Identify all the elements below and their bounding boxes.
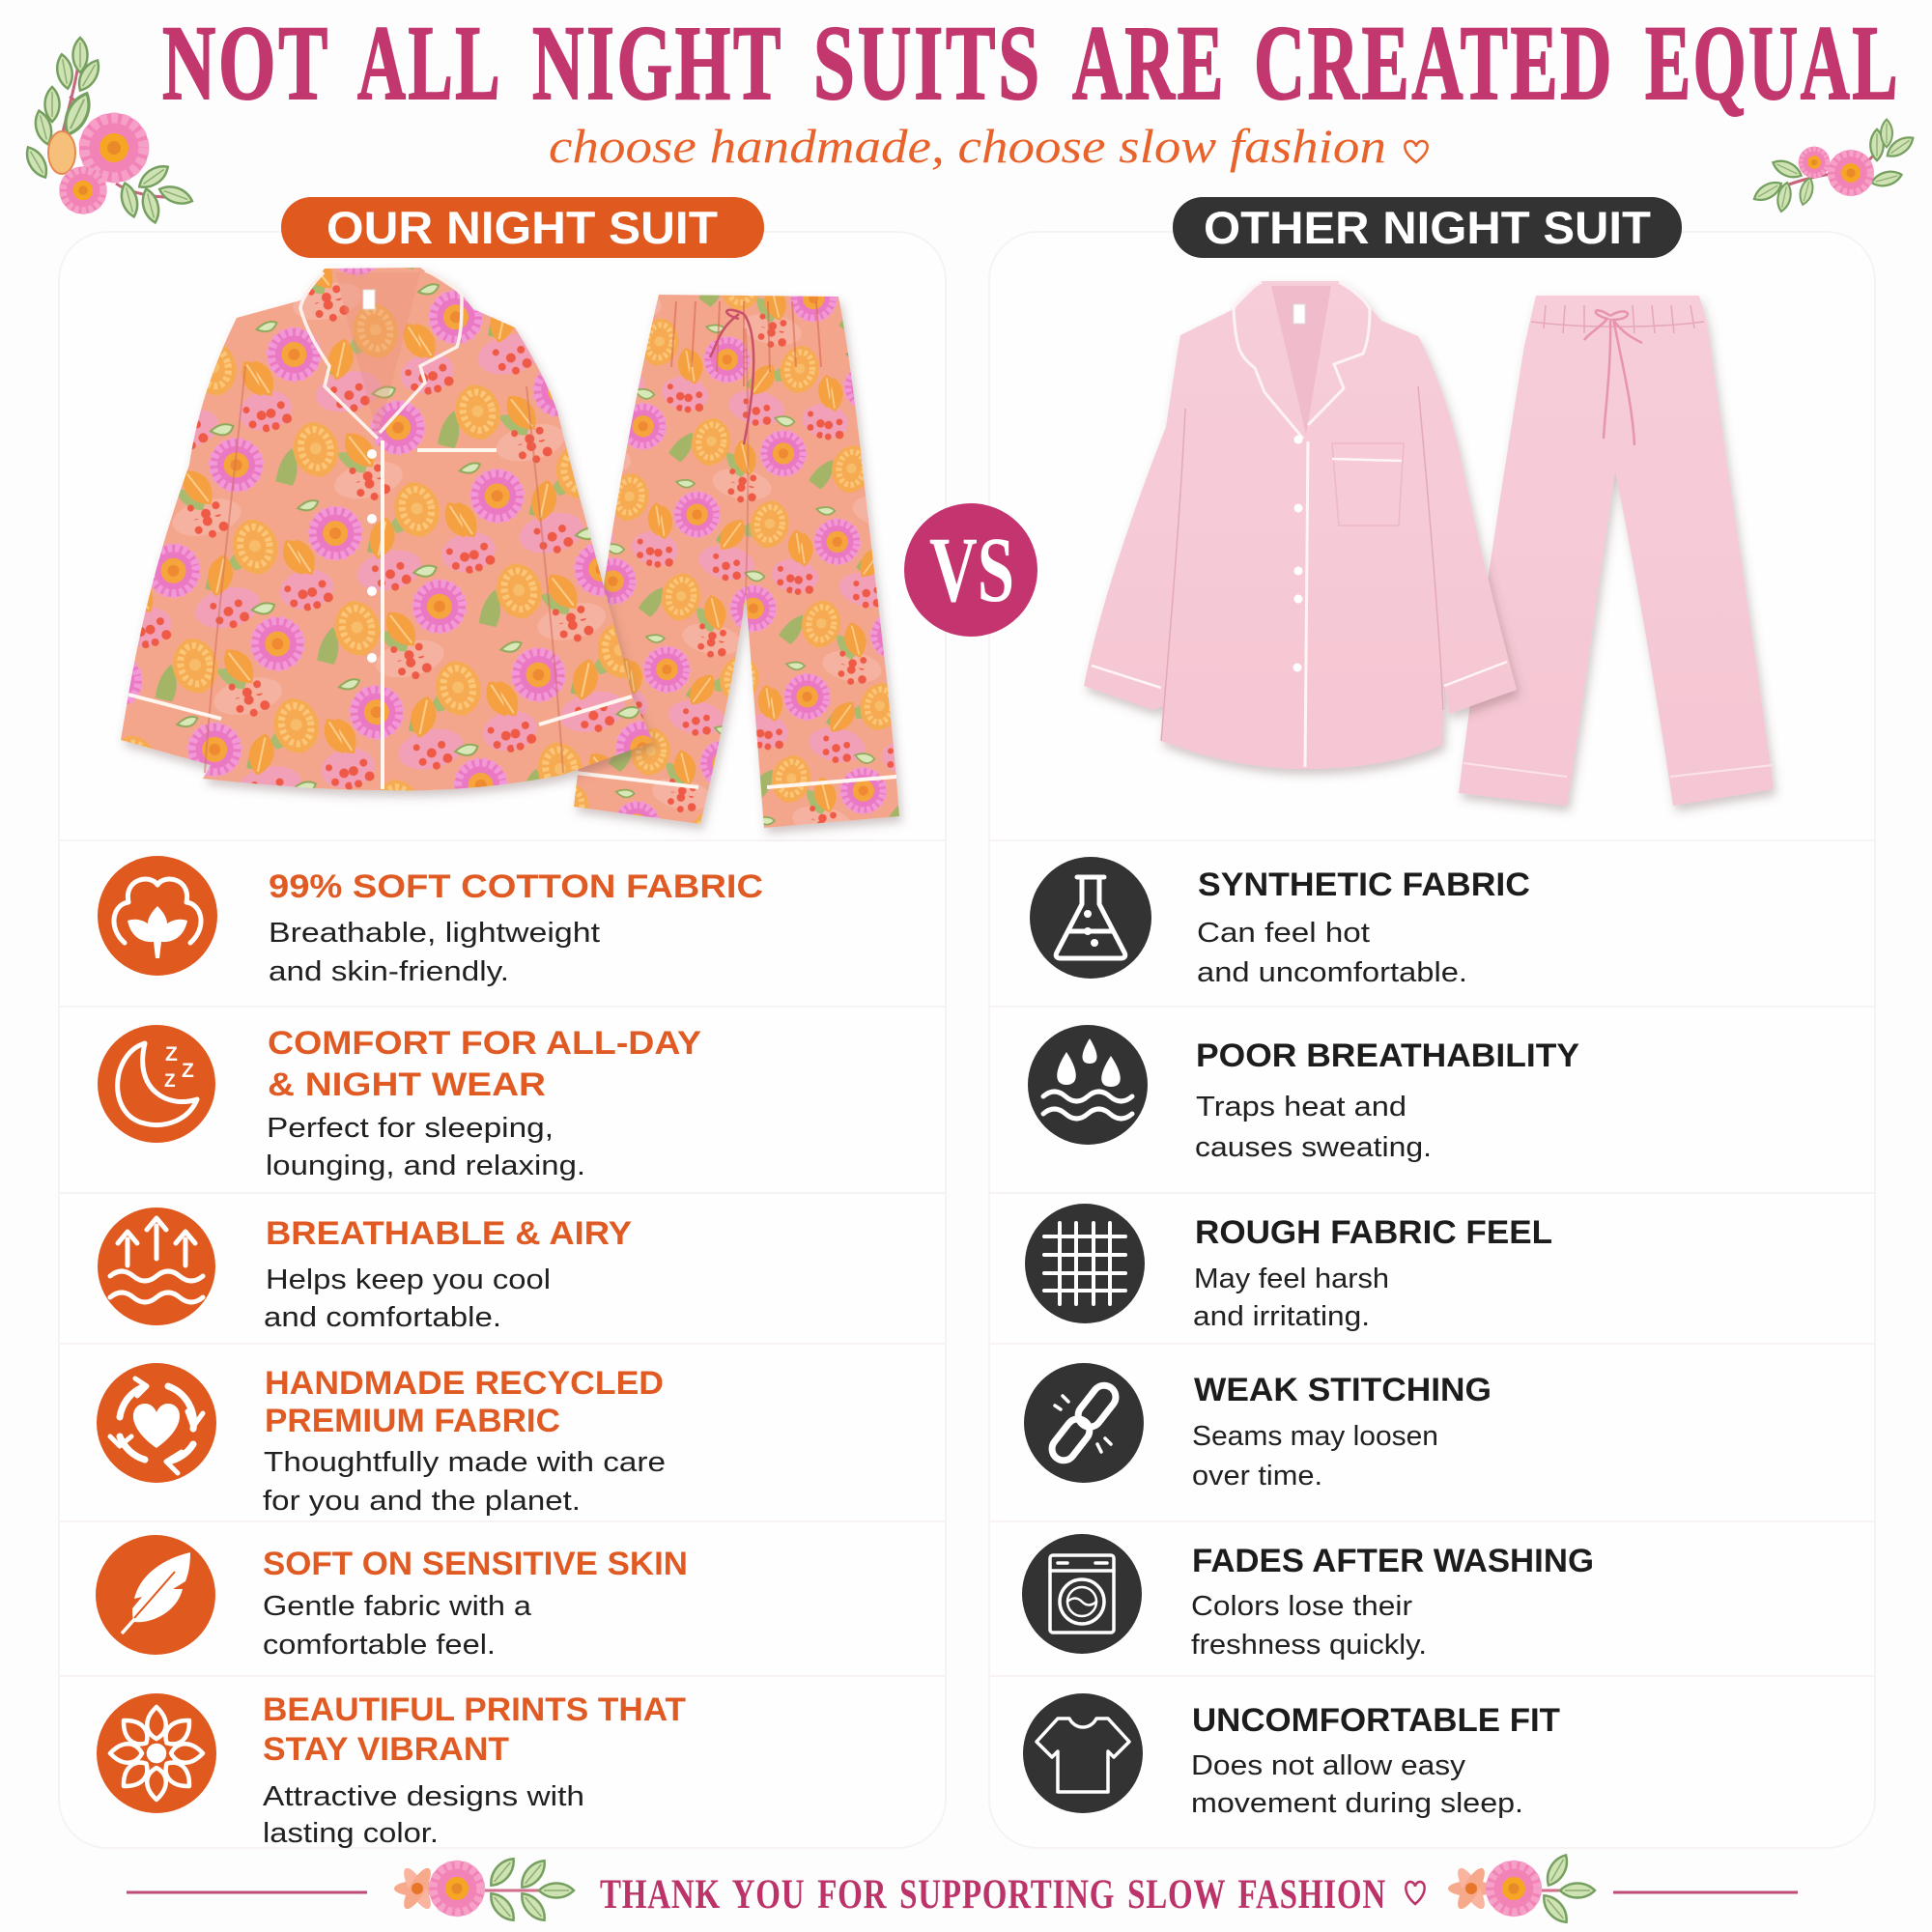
description: Does not allow easy [1191,1750,1466,1781]
pill heading: OTHER NIGHT SUIT [1204,202,1651,253]
drawback: poor breathability [1028,1025,1579,1163]
heading: WEAK STITCHING [1194,1372,1492,1408]
description [1191,1750,1523,1819]
description [1193,1264,1389,1332]
description: Breathable, lightweight [269,918,600,949]
plain pink trousers [1459,296,1774,806]
heading: COMFORT FOR ALL-DAY [268,1025,701,1062]
panel frame [989,232,1875,1848]
panel frame [59,232,946,1848]
description: comfortable feel. [263,1630,496,1661]
plain pink shirt [1084,281,1517,769]
drawback: synthetic fabric [1030,857,1530,988]
icon: flask [1030,857,1151,979]
description: Colors lose their [1191,1591,1412,1622]
heading [268,1025,701,1103]
footer [127,1852,1798,1927]
panel: other night suit [989,197,1875,1848]
feature: comfort [98,1025,701,1181]
description: causes sweating. [1195,1132,1432,1163]
floral pyjama shirt [121,268,653,790]
icon: heart [1406,1882,1425,1904]
description: Perfect for sleeping, [267,1113,554,1144]
feature: breathable [98,1208,632,1333]
description: Attractive designs with [263,1781,584,1812]
icon: moon and zzz [98,1025,215,1143]
description: over time. [1192,1461,1322,1492]
VS badge: VS [929,518,1014,621]
heading [263,1691,686,1768]
floral ornament: top right [1751,120,1917,213]
floral ornament: top left [22,38,194,224]
icon: t-shirt [1023,1693,1143,1813]
title: ALL [357,4,502,122]
floral ornament: footer right [1448,1852,1595,1927]
description: Traps heat and [1196,1092,1406,1122]
description [263,1591,532,1661]
description: lasting color. [263,1818,439,1849]
drawback: rough fabric [1025,1204,1552,1332]
heading: BREATHABLE & AIRY [266,1215,632,1252]
description [269,918,600,987]
icon: cotton boll [98,856,217,976]
drawback: fades after washing [1022,1534,1594,1661]
heading: BEAUTIFUL PRINTS THAT [263,1691,686,1728]
icon: coarse weave [1025,1204,1145,1323]
description [266,1113,585,1181]
icon: droplets over waves [1028,1025,1148,1145]
VS badge [904,503,1037,637]
footer message: THANK YOU FOR SUPPORTING SLOW FASHION [600,1872,1386,1918]
panel: our night suit [59,197,946,1849]
feature: handmade recycled [97,1363,666,1517]
feature: vibrant prints [97,1691,686,1849]
feature: soft cotton [98,856,763,987]
icon: moon and zzz: Z [165,1043,178,1065]
description: lounging, and relaxing. [266,1151,585,1181]
description: Helps keep you cool [266,1264,551,1295]
icon: moon and zzz: Z [164,1071,176,1092]
description [1195,1092,1432,1163]
heading: & NIGHT WEAR [268,1066,546,1103]
description: May feel harsh [1194,1264,1389,1294]
subtitle: choose handmade, choose slow fashion [549,119,1386,173]
heading: SYNTHETIC FABRIC [1198,867,1530,903]
heading: 99% SOFT COTTON FABRIC [269,868,763,905]
title: CREATED [1254,4,1614,122]
description [263,1781,584,1849]
description: and skin-friendly. [269,956,509,987]
icon: washing machine [1022,1534,1142,1654]
icon: flower [97,1693,216,1813]
drawback: uncomfortable fit [1023,1693,1560,1819]
heading: SOFT ON SENSITIVE SKIN [263,1546,688,1582]
description: Seams may loosen [1192,1421,1438,1452]
floral ornament: footer left [394,1854,574,1925]
description: freshness quickly. [1191,1630,1427,1661]
heading: FADES AFTER WASHING [1192,1543,1594,1579]
title: NOT [162,4,330,122]
title: ARE [1072,4,1226,122]
description: movement during sleep. [1191,1788,1523,1819]
description: and irritating. [1193,1301,1370,1332]
icon: recycling heart [97,1363,216,1483]
heading: HANDMADE RECYCLED [265,1365,664,1402]
title: NIGHT [532,4,783,122]
title: SUITS [813,4,1042,122]
pill heading [281,197,764,258]
heading: UNCOMFORTABLE FIT [1192,1702,1560,1739]
description: Can feel hot [1197,918,1370,949]
icon: feather [96,1535,215,1655]
description: Thoughtfully made with care [264,1447,666,1478]
description: for you and the planet. [263,1486,581,1517]
title [162,4,1900,122]
heading: ROUGH FABRIC FEEL [1195,1214,1552,1251]
feature: sensitive skin [96,1535,688,1661]
description: and uncomfortable. [1197,957,1467,988]
description [263,1447,666,1517]
description [1192,1421,1438,1492]
description [1191,1591,1427,1661]
floral pyjama trousers [574,295,899,828]
heading [265,1365,664,1439]
icon: moon and zzz: Z [182,1060,194,1082]
pill heading: OUR NIGHT SUIT [327,202,718,253]
description: and comfortable. [264,1302,501,1333]
drawback: weak stitching [1024,1363,1492,1492]
heading: STAY VIBRANT [263,1731,509,1768]
description [264,1264,551,1333]
description: Gentle fabric with a [263,1591,532,1622]
heading: PREMIUM FABRIC [265,1403,560,1439]
icon: broken chain link [1024,1363,1144,1483]
description [1197,918,1467,988]
heading: POOR BREATHABILITY [1196,1037,1579,1074]
icon: arrows over waves [98,1208,215,1325]
